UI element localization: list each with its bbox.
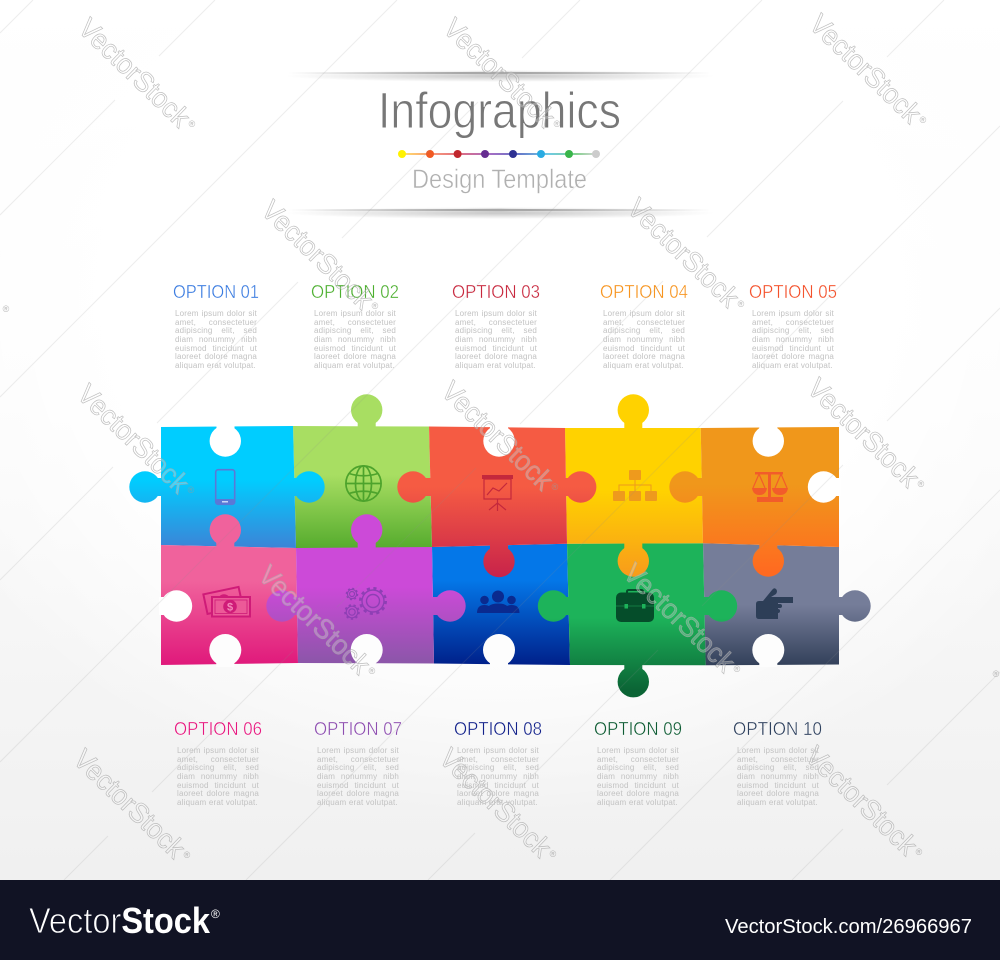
watermark registered marks: ® [184,850,191,860]
option titles, bottom row: OPTION 10 [733,719,822,739]
puzzle [129,394,871,697]
text block: option 04 [603,309,685,370]
piece: pink option 06 [159,514,298,667]
watermarks: VectorStock [436,375,560,497]
title block [285,70,715,219]
watermark registered marks: ® [189,119,196,129]
text block: option 05: aliquam erat volutpat. [752,361,833,370]
option titles, top row: OPTION 03 [452,282,540,302]
watermarks: VectorStock [802,372,926,494]
watermark registered marks: ® [918,479,925,489]
text block: option 06: laoreet dolore magna [177,789,259,798]
text block: option 08: diam nonummy nibh [457,772,539,781]
piece: blue option 01 [129,424,325,548]
icon: pointing hand [756,588,793,619]
text block: option 03 [455,309,537,370]
text block: option 01: Lorem ipsum dolor sit [175,309,257,318]
text block: option 09: euismod tincidunt ut [597,781,679,790]
option titles, bottom row: OPTION 09 [594,719,682,739]
text block: option 08: euismod tincidunt ut [457,781,539,790]
text block: option 08: laoreet dolore magna [457,789,539,798]
piece: orange option 05 [669,424,841,577]
text block: option 10 [737,746,819,807]
text block: option 07: laoreet dolore magna [317,789,399,798]
icon: org chart [613,470,657,501]
text block: option 04: diam nonummy nibh [603,335,685,344]
text block: option 10: euismod tincidunt ut [737,781,819,790]
text block: option 08: amet, consectetuer [457,755,539,764]
text block: option 07: adipiscing elit, sed [317,763,399,772]
text block: option 10: amet, consectetuer [737,755,819,764]
text block: option 02: Lorem ipsum dolor sit [314,309,396,318]
text block: option 06: diam nonummy nibh [177,772,259,781]
piece: gray option 10 [703,543,871,667]
watermark registered marks: ® [920,115,927,125]
text block: option 02: diam nonummy nibh [314,335,396,344]
icon: people [477,590,520,613]
footer logo: VectorStock [29,900,211,941]
text block: option 09: aliquam erat volutpat. [597,798,678,807]
text block: option 09: amet, consectetuer [597,755,679,764]
option titles, top row [173,282,837,302]
text block: option 03: amet, consectetuer [455,318,537,327]
text block: option 08: Lorem ipsum dolor sit [457,746,539,755]
colored dot line [398,150,600,158]
text block: option 10: adipiscing elit, sed [737,763,819,772]
text block: option 01: amet, consectetuer [175,318,257,327]
text block: option 05: Lorem ipsum dolor sit [752,309,834,318]
option titles, bottom row: OPTION 06 [174,719,262,739]
text block: option 03: euismod tincidunt ut [455,344,537,353]
icon: banknotes [203,587,250,616]
text block: option 07: Lorem ipsum dolor sit [317,746,399,755]
text block: option 05: adipiscing elit, sed [752,326,834,335]
text block: option 06: aliquam erat volutpat. [177,798,258,807]
watermarks: VectorStock [253,559,377,681]
watermarks: VectorStock [804,8,928,130]
watermarks: VectorStock [256,194,380,316]
piece: red option 03 [397,424,596,577]
watermarks: VectorStock [622,192,746,314]
option titles, top row: OPTION 05 [749,282,837,302]
watermark registered marks: ® [550,849,557,859]
text block: option 02 [314,309,396,370]
piece: yellow option 04 [565,394,703,577]
watermarks: VectorStock [68,743,192,865]
watermark registered marks: ® [554,119,561,129]
text block: option 04: amet, consectetuer [603,318,685,327]
watermark registered marks: ® [734,664,741,674]
option titles, bottom row: OPTION 07 [314,719,402,739]
text block: option 08 [457,746,539,807]
watermark registered marks: ® [552,482,559,492]
text block: option 04: euismod tincidunt ut [603,344,685,353]
text block: option 01: adipiscing elit, sed [175,326,257,335]
footer bar [0,880,1000,960]
icon: balance scale [752,472,788,502]
text block: option 10: aliquam erat volutpat. [737,798,818,807]
icon: globe [346,466,381,501]
option titles, top row: OPTION 02 [311,282,399,302]
watermark registered marks: ® [3,304,10,314]
text block: option 07 [317,746,399,807]
text block: option 02: amet, consectetuer [314,318,396,327]
text block: option 03: adipiscing elit, sed [455,326,537,335]
text block: option 03: laoreet dolore magna [455,352,537,361]
text block: option 01: laoreet dolore magna [175,352,257,361]
piece: green option 02 [293,394,432,548]
text block: option 05: amet, consectetuer [752,318,834,327]
icon: gears [345,588,386,619]
watermarks: VectorStock [72,378,196,500]
watermark registered marks [3,115,1000,860]
text block: option 06: adipiscing elit, sed [177,763,259,772]
watermarks: VectorStock [434,742,558,864]
watermarks: VectorStock [800,740,924,862]
watermarks: VectorStock [73,12,197,134]
text block: option 05 [752,309,834,370]
option titles, top row: OPTION 04 [600,282,688,302]
text block: option 07: euismod tincidunt ut [317,781,399,790]
piece: purple option 07 [266,514,466,667]
text block: option 09: diam nonummy nibh [597,772,679,781]
option titles, bottom row [174,719,822,739]
watermark registered marks: ® [738,299,745,309]
text block: option 01: aliquam erat volutpat. [175,361,256,370]
text block: option 03: diam nonummy nibh [455,335,537,344]
text block: option 10: Lorem ipsum dolor sit [737,746,819,755]
watermark registered marks: ® [372,301,379,311]
text block: option 10: diam nonummy nibh [737,772,819,781]
text block: option 02: adipiscing elit, sed [314,326,396,335]
option titles, top row: OPTION 01 [173,282,259,302]
option titles, bottom row: OPTION 08 [454,719,542,739]
text block: option 01 [175,309,257,370]
text block: option 03: aliquam erat volutpat. [455,361,536,370]
heading: Infographics: Infographics [378,82,621,139]
text block: option 07: amet, consectetuer [317,755,399,764]
text block: option 05: diam nonummy nibh [752,335,834,344]
watermarks: VectorStock [618,557,742,679]
text block: option 08: adipiscing elit, sed [457,763,539,772]
icon: smartphone [216,470,235,504]
watermarks [68,8,928,865]
watermark registered marks: ® [916,847,923,857]
watermark registered marks: ® [993,669,1000,679]
watermark registered marks: ® [369,666,376,676]
text block: option 07: aliquam erat volutpat. [317,798,398,807]
text block: option 04: Lorem ipsum dolor sit [603,309,685,318]
text block: option 06: Lorem ipsum dolor sit [177,746,259,755]
text block: option 09: adipiscing elit, sed [597,763,679,772]
text block: option 09: laoreet dolore magna [597,789,679,798]
icon: briefcase [616,590,654,622]
text block: option 06: euismod tincidunt ut [177,781,259,790]
text block: option 10: laoreet dolore magna [737,789,819,798]
text block: option 05: laoreet dolore magna [752,352,834,361]
text block: option 01: diam nonummy nibh [175,335,257,344]
watermark registered marks: ® [188,485,195,495]
text block: option 02: laoreet dolore magna [314,352,396,361]
icon: presentation board [482,475,513,511]
icon: banknotes: $ [227,602,233,614]
text block: option 04: aliquam erat volutpat. [603,361,684,370]
text block: option 09: Lorem ipsum dolor sit [597,746,679,755]
text block: option 08: aliquam erat volutpat. [457,798,538,807]
footer url: VectorStock.com/26966967 [725,916,972,938]
text block: option 02: aliquam erat volutpat. [314,361,395,370]
text block: option 07: diam nonummy nibh [317,772,399,781]
text block: option 09 [597,746,679,807]
piece: green option 09 [538,543,737,697]
text block: option 02: euismod tincidunt ut [314,344,396,353]
text block: option 01: euismod tincidunt ut [175,344,257,353]
text block: option 04: adipiscing elit, sed [603,326,685,335]
text block: option 04: laoreet dolore magna [603,352,685,361]
footer registered mark: ® [211,907,220,921]
piece: blue option 08 [432,544,570,667]
watermarks: VectorStock [438,12,562,134]
text block: option 03: Lorem ipsum dolor sit [455,309,537,318]
subheading: Design Template: Design Template [412,164,587,194]
text block: option 06: amet, consectetuer [177,755,259,764]
text block: option 05: euismod tincidunt ut [752,344,834,353]
text block: option 06 [177,746,259,807]
